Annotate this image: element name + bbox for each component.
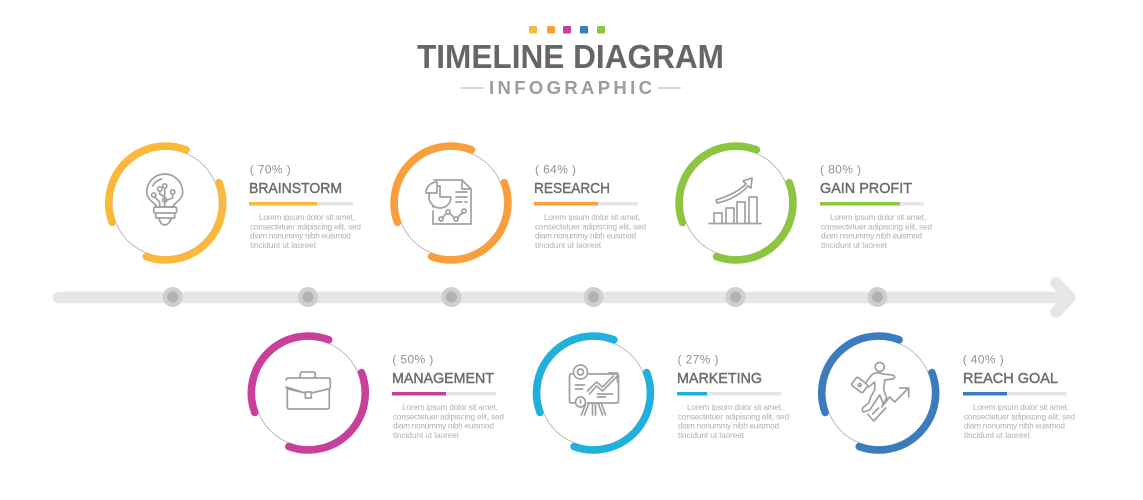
progress bar xyxy=(677,392,781,396)
panel: marketing xyxy=(537,336,789,450)
body text xyxy=(964,403,1075,440)
body text: Lorem ipsum dolor sit amet, xyxy=(973,403,1069,412)
icon: report xyxy=(426,180,471,224)
body text: diam nonummy nibh euismod xyxy=(964,422,1065,430)
body text xyxy=(821,213,932,250)
body text: tincidunt ut laoreet xyxy=(964,431,1031,440)
body text: Lorem ipsum dolor sit amet, xyxy=(402,403,498,412)
body text: consectetuer adipiscing elit, sed xyxy=(821,222,932,232)
heading: BRAINSTORM xyxy=(249,180,342,197)
body text: tincidunt ut laoreet xyxy=(678,431,745,440)
body text: diam nonummy nibh euismod xyxy=(535,232,636,240)
ring xyxy=(251,336,365,450)
progress bar xyxy=(963,392,1067,396)
ring xyxy=(822,336,936,450)
body text: diam nonummy nibh euismod xyxy=(250,232,351,240)
body text: consectetuer adipiscing elit, sed xyxy=(535,222,646,232)
icon: running businessman xyxy=(851,362,909,421)
percent: ( 80% ) xyxy=(820,162,861,176)
body text: consectetuer adipiscing elit, sed xyxy=(964,412,1075,422)
icon: briefcase xyxy=(286,372,330,409)
body text xyxy=(393,403,504,440)
timeline nodes xyxy=(163,287,887,307)
percent: ( 27% ) xyxy=(678,352,718,366)
percent: ( 64% ) xyxy=(535,162,576,176)
ring xyxy=(394,146,508,260)
panel: research xyxy=(394,146,646,260)
percent: ( 50% ) xyxy=(392,352,433,366)
colour dots xyxy=(529,26,605,34)
panel: gain profit xyxy=(679,146,932,260)
icon: light bulb xyxy=(147,174,183,225)
body text: tincidunt ut laoreet xyxy=(821,241,888,250)
body text: tincidunt ut laoreet xyxy=(393,431,460,440)
heading: GAIN PROFIT xyxy=(820,180,912,197)
ring xyxy=(537,336,650,450)
timeline arrow xyxy=(58,283,1070,312)
progress bar xyxy=(820,202,924,206)
body text: Lorem ipsum dolor sit amet, xyxy=(259,213,355,222)
progress bar xyxy=(249,202,353,206)
heading: REACH GOAL xyxy=(963,370,1058,387)
body text: consectetuer adipiscing elit, sed xyxy=(678,412,789,422)
body text: diam nonummy nibh euismod xyxy=(821,232,922,240)
panel: brainstorm xyxy=(109,146,361,260)
progress bar xyxy=(392,392,496,396)
body text xyxy=(250,213,361,250)
body text: Lorem ipsum dolor sit amet, xyxy=(544,213,640,222)
body text xyxy=(678,403,789,440)
title: TIMELINE DIAGRAM xyxy=(417,38,724,75)
body text: Lorem ipsum dolor sit amet, xyxy=(830,213,926,222)
icon: growth chart xyxy=(709,178,761,224)
ring xyxy=(679,146,793,260)
body text xyxy=(535,213,646,250)
subtitle: INFOGRAPHIC xyxy=(489,77,652,98)
body text: consectetuer adipiscing elit, sed xyxy=(393,412,504,422)
body text: Lorem ipsum dolor sit amet, xyxy=(687,403,783,412)
body text: consectetuer adipiscing elit, sed xyxy=(250,222,361,232)
percent: ( 40% ) xyxy=(963,352,1004,366)
ring xyxy=(109,146,223,260)
body text: tincidunt ut laoreet xyxy=(535,241,602,250)
body text: diam nonummy nibh euismod xyxy=(393,422,494,430)
progress bar xyxy=(534,202,638,206)
panel: management xyxy=(251,336,504,450)
heading: MANAGEMENT xyxy=(392,370,494,387)
icon: presentation board xyxy=(570,365,618,415)
body text: diam nonummy nibh euismod xyxy=(678,422,779,430)
body text: tincidunt ut laoreet xyxy=(250,241,317,250)
percent: ( 70% ) xyxy=(250,162,291,176)
panel: reach goal xyxy=(822,336,1075,450)
heading: RESEARCH xyxy=(534,180,610,197)
heading: MARKETING xyxy=(677,370,762,387)
